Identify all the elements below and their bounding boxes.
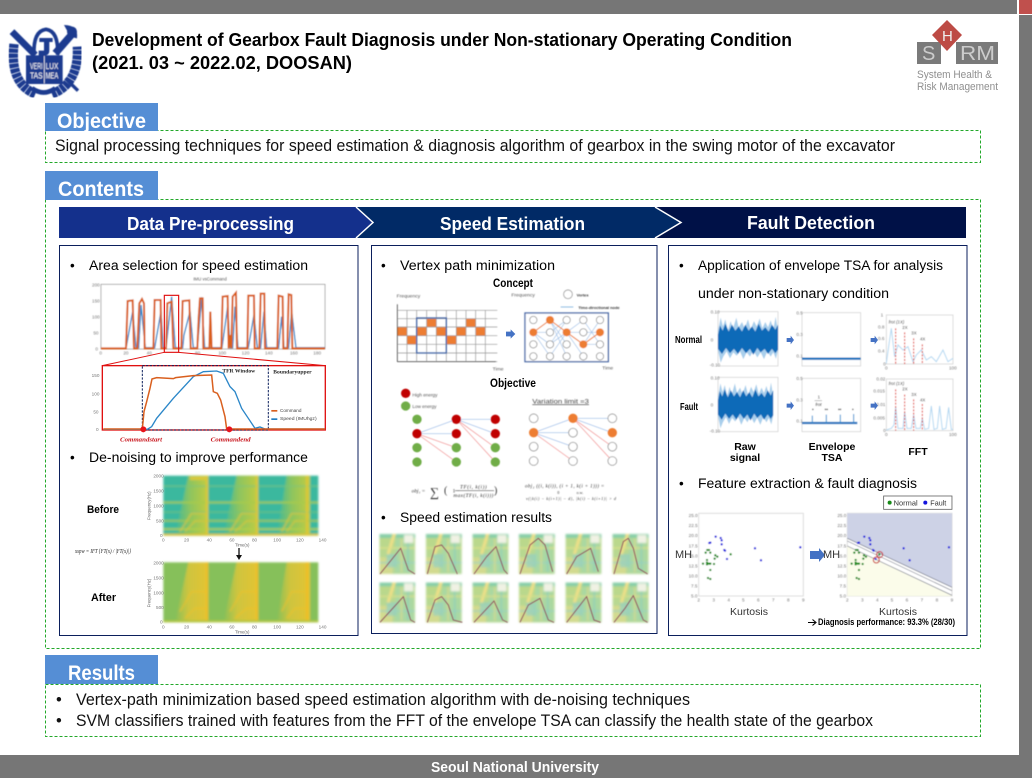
scatter plot: SVM classification: 5 bbox=[891, 597, 894, 602]
chart: FFT fault: frot (1X) bbox=[889, 381, 905, 386]
scatter plot: raw features: 12.5 bbox=[689, 563, 698, 568]
spectrogram: after: 1500 bbox=[153, 575, 164, 580]
formula: objective two: v(|k(i) − k(i+1)| − d), |k(i) − k(i+1)| > d bbox=[526, 496, 616, 502]
chart: FFT normal: 3X bbox=[911, 331, 917, 336]
callout: diagnosis performance: Diagnosis performance: 93.3% (28/30) bbox=[818, 617, 955, 628]
bullet: vertex path minimization: Vertex path minimization bbox=[400, 258, 555, 273]
chart: FFT normal: 2X bbox=[902, 325, 908, 330]
axis label: kurtosis right: Kurtosis bbox=[879, 606, 917, 618]
chart: TFR window detail: Speed (IMUhgz) bbox=[280, 416, 317, 421]
chart: raw signal normal bbox=[710, 309, 778, 368]
spectrogram: before: 0 bbox=[160, 533, 163, 538]
bullet: speed estimation results: • bbox=[381, 510, 386, 525]
chart: raw signal fault: -0.10 bbox=[710, 429, 721, 434]
formula: objective one bbox=[412, 483, 497, 500]
spectrogram: before: 500 bbox=[156, 519, 164, 524]
spectrogram: after: 2000 bbox=[153, 560, 164, 565]
spectrogram: after: 100 bbox=[273, 624, 281, 629]
diagram: frequency time grid: Time bbox=[493, 366, 504, 372]
chart: envelope TSA fault: ** bbox=[838, 407, 842, 412]
scatter plot: raw features bbox=[689, 513, 805, 602]
chart: TFR window detail: 0 bbox=[96, 427, 99, 432]
chart: FFT fault: 0.01 bbox=[876, 402, 886, 407]
chart: FFT normal: 0.6 bbox=[878, 336, 885, 341]
label: normal: Normal bbox=[675, 334, 702, 346]
title: Development of Gearbox Fault Diagnosis under Non-stationary Operating Condition bbox=[92, 30, 792, 50]
footer text: Seoul National University bbox=[431, 760, 599, 776]
diagram: energy graph bbox=[401, 389, 500, 467]
column label: raw signal: signal bbox=[730, 452, 760, 464]
scatter plot: raw features: 15.0 bbox=[689, 553, 698, 558]
formula: objective two: 0 bbox=[557, 490, 559, 495]
legend: normal and fault: Fault bbox=[930, 498, 946, 507]
chart: FFT fault: 4X bbox=[920, 398, 925, 403]
spectrogram: after: 140 bbox=[319, 624, 327, 629]
bullet: speed estimation results: Speed estimation results bbox=[400, 510, 552, 525]
chevron label: fault detection: Fault Detection bbox=[747, 213, 875, 233]
formula: objective one: ( bbox=[444, 486, 447, 497]
spectrogram: before: 1000 bbox=[153, 504, 164, 509]
spectrogram: after: Frequency(Hz) bbox=[147, 578, 152, 607]
icon: university emblem: VERI bbox=[30, 62, 43, 71]
scatter plot: raw features: 7 bbox=[772, 597, 775, 602]
scatter plot: SVM classification: 20.0 bbox=[837, 533, 847, 538]
formula: objective one: TF(i, k(i)) bbox=[460, 483, 487, 490]
spectrogram: after: 0 bbox=[160, 620, 163, 625]
bullet: area selection: Area selection for speed estimation bbox=[89, 258, 308, 273]
chevron label: data pre-processing: Data Pre-processing bbox=[127, 214, 294, 234]
bullet: area selection: • bbox=[70, 258, 75, 273]
spectrogram: before bbox=[147, 474, 327, 548]
chart: TFR window detail bbox=[92, 366, 325, 444]
diagram: energy graph: High energy bbox=[412, 393, 438, 398]
chart: envelope TSA fault: 0.3 bbox=[796, 397, 803, 402]
spectrogram: before: 100 bbox=[273, 538, 281, 543]
scatter plot: raw features: 8 bbox=[787, 597, 790, 602]
chart: envelope TSA fault: 0.5 bbox=[796, 376, 803, 381]
formula: objective one: obj₁ = bbox=[412, 488, 426, 494]
icon: university emblem bbox=[12, 25, 78, 94]
chart: TFR window detail: 50 bbox=[93, 410, 99, 415]
spectrogram: before: 140 bbox=[319, 538, 327, 543]
formula: objective two: obj₂ ((i, k(i)), (i + 1, k(i + 1))) = bbox=[525, 484, 604, 489]
chart: TFR window detail: Boundaryupper bbox=[273, 369, 312, 375]
icon: SHRM logo: System Health & bbox=[917, 69, 993, 81]
chart: TFR window detail: Commandend bbox=[211, 437, 252, 444]
chart: TFR window detail: 100 bbox=[92, 391, 100, 396]
icon: SHRM logo: S bbox=[922, 43, 935, 65]
heading: results bbox=[45, 655, 158, 685]
footer bar bbox=[0, 755, 1032, 778]
spectrogram: after: 0 bbox=[162, 624, 165, 629]
heading: contents bbox=[45, 171, 158, 201]
spectrogram: before: 1500 bbox=[153, 489, 164, 494]
chart: FFT normal: 0.8 bbox=[878, 324, 885, 329]
column label: envelope TSA: TSA bbox=[822, 452, 843, 464]
bullet: feature extraction: • bbox=[679, 476, 684, 491]
axis label: MH right: MH bbox=[823, 549, 840, 561]
spectrogram: after: 1000 bbox=[153, 590, 164, 595]
zoom callout lines bbox=[102, 295, 325, 366]
spectrogram: before: 80 bbox=[252, 538, 258, 543]
scatter plot: SVM classification: 8 bbox=[936, 597, 939, 602]
chart: envelope TSA normal: 0.1 bbox=[796, 353, 803, 358]
chart: FFT fault: 0.02 bbox=[876, 377, 886, 382]
chart: IMU vs command: 140 bbox=[265, 350, 273, 355]
chart: raw signal fault: 0.10 bbox=[711, 375, 720, 380]
chart: FFT normal: 100 bbox=[949, 365, 957, 370]
scatter plot: raw features: 17.5 bbox=[689, 543, 698, 548]
chart: IMU vs command: 80 bbox=[195, 350, 201, 355]
panel: data pre-processing bbox=[60, 246, 358, 636]
process chevrons bbox=[59, 207, 966, 238]
arrows: normal row bbox=[787, 336, 878, 344]
chart: raw signal normal: 0 bbox=[711, 338, 714, 343]
formula: objective two bbox=[525, 484, 616, 502]
diagram: variation limit graph bbox=[529, 398, 617, 465]
scatter plot: SVM classification: 25.0 bbox=[837, 513, 847, 518]
spectrogram: before: 20 bbox=[184, 538, 190, 543]
formula: objective one: ) bbox=[494, 486, 497, 497]
scatter plot: raw features: 3 bbox=[712, 597, 715, 602]
chart: TFR window detail: 150 bbox=[92, 373, 100, 378]
results bullet two: • bbox=[56, 712, 62, 730]
arrows: fault row bbox=[787, 401, 878, 410]
title: (2021. 03 ~ 2022.02, DOOSAN) bbox=[92, 53, 352, 73]
icon: SHRM logo: RM bbox=[960, 43, 995, 65]
spectrogram: after: 80 bbox=[252, 624, 258, 629]
legend: normal and fault bbox=[884, 496, 952, 509]
column label: raw signal: Raw bbox=[734, 441, 757, 453]
scatter plot: SVM classification: 5.0 bbox=[840, 593, 847, 598]
scatter plot: SVM classification: 17.5 bbox=[837, 543, 847, 548]
small multiples: speed estimation results bbox=[379, 534, 648, 622]
scatter plot: SVM classification: 22.5 bbox=[837, 523, 847, 528]
arrow: before to after bbox=[236, 548, 242, 560]
diagram: vertex graph bbox=[511, 290, 620, 371]
right side bar bbox=[1019, 15, 1032, 755]
scatter plot: raw features: 4 bbox=[727, 597, 730, 602]
chart: envelope TSA fault: 1 bbox=[818, 395, 821, 400]
icon: SHRM logo bbox=[917, 20, 998, 93]
legend: normal and fault: Normal bbox=[894, 498, 918, 507]
diagram: variation limit graph: Variation limit =3 bbox=[532, 398, 589, 405]
chart: IMU vs command: 0 bbox=[99, 350, 102, 355]
diagram: frequency time grid bbox=[397, 294, 504, 372]
chart: envelope TSA fault: * bbox=[812, 407, 814, 412]
formula: whitening: xspw = IFT {FT(x) / |FT(x)|} bbox=[74, 548, 131, 555]
chart: envelope TSA fault: 0.1 bbox=[796, 419, 803, 424]
scatter plot: SVM classification: 7.5 bbox=[840, 583, 847, 588]
chart: envelope TSA fault bbox=[796, 376, 861, 432]
chart: IMU vs command: 100 bbox=[92, 314, 100, 319]
scatter plot: raw features: 5.0 bbox=[691, 593, 698, 598]
chart: FFT fault: 0 bbox=[883, 428, 886, 433]
spectrogram: before: 40 bbox=[207, 538, 212, 543]
axis label: MH left: MH bbox=[675, 549, 692, 561]
spectrogram: before: Time(s) bbox=[235, 543, 250, 548]
scatter plot: SVM classification: 3 bbox=[861, 597, 864, 602]
formula: objective one: ∑ bbox=[430, 486, 439, 500]
scatter plot: raw features: 2 bbox=[697, 597, 700, 602]
spectrogram: after bbox=[147, 560, 327, 635]
spectrogram: before: 0 bbox=[162, 538, 165, 543]
chevron label: speed estimation: Speed Estimation bbox=[440, 214, 585, 234]
formula: objective one: 1 − bbox=[453, 488, 460, 494]
spectrogram: before: 2000 bbox=[153, 474, 164, 479]
chart: FFT normal: 1 bbox=[881, 313, 884, 318]
diagram: frequency time grid: Frequency bbox=[397, 294, 421, 300]
chart: envelope TSA fault: ** bbox=[825, 407, 828, 412]
icon: SHRM logo: H bbox=[942, 28, 953, 45]
spectrogram: after: Time(s) bbox=[235, 630, 250, 635]
column label: FFT: FFT bbox=[908, 446, 928, 458]
spectrogram: after: 60 bbox=[229, 624, 235, 629]
chart: IMU vs command: IMU vsCommand bbox=[193, 276, 227, 281]
chart: raw signal normal: -0.10 bbox=[710, 363, 721, 368]
chart: FFT fault: 3X bbox=[911, 392, 917, 397]
chart: FFT fault bbox=[873, 377, 957, 437]
chart: envelope TSA fault: * bbox=[852, 407, 854, 412]
scatter plot: SVM classification: 7 bbox=[921, 597, 924, 602]
bullet: application of envelope TSA: • bbox=[679, 258, 684, 273]
heading: concept: Concept bbox=[493, 278, 533, 290]
chart: IMU vs command: 50 bbox=[93, 330, 99, 335]
scatter plot: SVM classification bbox=[837, 513, 954, 602]
bullet: de-noising: • bbox=[70, 450, 75, 465]
arrow: grid to graph bbox=[506, 329, 515, 339]
results bullet one: • bbox=[56, 691, 62, 709]
diagram: vertex graph: Frequency bbox=[511, 293, 535, 299]
results bullet two: SVM classifiers trained with features from the FFT of the envelope TSA can classify the health state of the gearbox bbox=[76, 712, 874, 730]
chart: TFR window detail: TFR Window bbox=[222, 369, 256, 375]
scatter plot: raw features: 9 bbox=[802, 597, 805, 602]
chart: FFT fault: 0.015 bbox=[873, 389, 885, 394]
icon: university emblem: TAS bbox=[30, 71, 43, 80]
scatter plot: raw features: 10.0 bbox=[689, 573, 698, 578]
scatter plot: SVM classification: 9 bbox=[951, 597, 954, 602]
scatter plot: raw features: 6 bbox=[757, 597, 760, 602]
heading: objective bbox=[45, 103, 158, 133]
icon: university emblem: LUX bbox=[46, 62, 59, 71]
heading: objective: Objective bbox=[57, 110, 146, 133]
chart: envelope TSA normal: 0.5 bbox=[796, 311, 803, 316]
chart: FFT normal: 4X bbox=[920, 336, 925, 341]
spectrogram: after: 500 bbox=[156, 605, 164, 610]
icon: SHRM logo: Risk Management bbox=[917, 81, 998, 93]
arrow: to classified scatter bbox=[810, 548, 825, 562]
chart: FFT normal: 0 bbox=[883, 362, 886, 367]
panel: speed estimation bbox=[372, 246, 657, 634]
section box: contents bbox=[46, 200, 980, 648]
chart: FFT normal: frot (1X) bbox=[889, 320, 905, 325]
chart: TFR window detail: Command bbox=[280, 408, 302, 413]
chart: FFT fault: 2X bbox=[902, 387, 908, 392]
diagram: energy graph: Low energy bbox=[412, 404, 437, 409]
bullet: application of envelope TSA: under non-stationary condition bbox=[698, 286, 889, 301]
spectrogram: before: 60 bbox=[229, 538, 235, 543]
chart: envelope TSA normal bbox=[796, 311, 861, 366]
section box: objective bbox=[46, 130, 980, 162]
heading: contents: Contents bbox=[58, 178, 144, 201]
axis label: kurtosis left: Kurtosis bbox=[730, 606, 768, 618]
chart: envelope TSA fault: frot bbox=[815, 402, 822, 407]
formula: objective two: o.w. bbox=[577, 490, 583, 495]
scatter plot: SVM classification: 2 bbox=[846, 597, 849, 602]
section box: results bbox=[46, 684, 980, 736]
formula: objective one: max(TF(i, k(i))) bbox=[453, 492, 494, 499]
title bbox=[92, 30, 792, 73]
chart: envelope TSA normal: 0.3 bbox=[796, 332, 803, 337]
diagram: vertex graph: Time-directional node bbox=[578, 305, 620, 310]
spectrogram: before: 120 bbox=[296, 538, 304, 543]
spectrogram: after: 40 bbox=[207, 624, 212, 629]
chart: IMU vs command: 20 bbox=[123, 350, 129, 355]
objective text: Signal processing techniques for speed estimation & diagnosis algorithm of gearbox in the swing motor of the excavator bbox=[55, 137, 895, 155]
chart: FFT normal bbox=[878, 313, 957, 370]
chart: raw signal normal: 0.10 bbox=[711, 309, 720, 314]
label: fault: Fault bbox=[680, 401, 698, 413]
chart: IMU vs command: 100 bbox=[218, 350, 226, 355]
scatter plot: SVM classification: 6 bbox=[906, 597, 909, 602]
scatter plot: raw features: 22.5 bbox=[689, 523, 698, 528]
scatter plot: SVM classification: 10.0 bbox=[837, 573, 847, 578]
chart: IMU vs command: 160 bbox=[290, 350, 298, 355]
chart: FFT fault: 0 bbox=[885, 432, 888, 437]
chart: IMU vs command: 0 bbox=[95, 346, 98, 351]
chart: IMU vs command: 120 bbox=[242, 350, 250, 355]
panel: fault detection bbox=[668, 246, 967, 636]
chart: IMU vs command: 40 bbox=[147, 350, 152, 355]
column label: envelope TSA: Envelope bbox=[809, 441, 855, 453]
bullet: de-noising: De-noising to improve performance bbox=[89, 450, 308, 465]
chart: FFT fault: 100 bbox=[949, 432, 957, 437]
heading: results: Results bbox=[68, 662, 135, 685]
label: after: After bbox=[91, 592, 117, 604]
spectrogram: after: 120 bbox=[296, 624, 304, 629]
scatter plot: raw features: 5 bbox=[742, 597, 745, 602]
chart: FFT fault: 0.005 bbox=[873, 415, 885, 420]
scatter plot: raw features: 7.5 bbox=[691, 583, 698, 588]
diagram: vertex graph: Vertex bbox=[577, 293, 589, 298]
chart: IMU vs command: 200 bbox=[92, 282, 100, 287]
chart: IMU vs command: 180 bbox=[313, 350, 321, 355]
results bullet one: Vertex-path minimization based speed estimation algorithm with de-noising techniques bbox=[76, 691, 690, 709]
chart: raw signal fault: 0 bbox=[711, 403, 714, 408]
bullet: application of envelope TSA: Application of envelope TSA for analysis bbox=[698, 258, 943, 273]
chart: IMU vs command: 150 bbox=[92, 298, 100, 303]
bullet: vertex path minimization: • bbox=[381, 258, 386, 273]
spectrogram: before: Frequency(Hz) bbox=[147, 491, 152, 520]
scatter plot: SVM classification: 12.5 bbox=[837, 563, 847, 568]
scatter plot: raw features: 25.0 bbox=[689, 513, 698, 518]
top bar bbox=[0, 0, 1017, 14]
bullet: feature extraction: Feature extraction & fault diagnosis bbox=[698, 476, 917, 491]
scatter plot: raw features: 20.0 bbox=[689, 533, 698, 538]
label: before: Before bbox=[87, 504, 119, 516]
diagram: vertex graph: Time bbox=[602, 365, 613, 371]
chart: FFT normal: 0.4 bbox=[878, 348, 885, 353]
spectrogram: after: 20 bbox=[184, 624, 190, 629]
chart: TFR window detail: Commandstart bbox=[120, 437, 162, 444]
scatter plot: SVM classification: 4 bbox=[876, 597, 879, 602]
scatter plot: SVM classification: 15.0 bbox=[837, 553, 847, 558]
chart: FFT normal: 0 bbox=[885, 365, 888, 370]
chart: raw signal fault bbox=[710, 375, 778, 434]
icon: university emblem: MEA bbox=[46, 71, 59, 80]
chart: IMU vs command bbox=[92, 276, 325, 355]
heading: objective diagram: Objective bbox=[490, 378, 536, 390]
top right red corner bbox=[1019, 0, 1032, 14]
